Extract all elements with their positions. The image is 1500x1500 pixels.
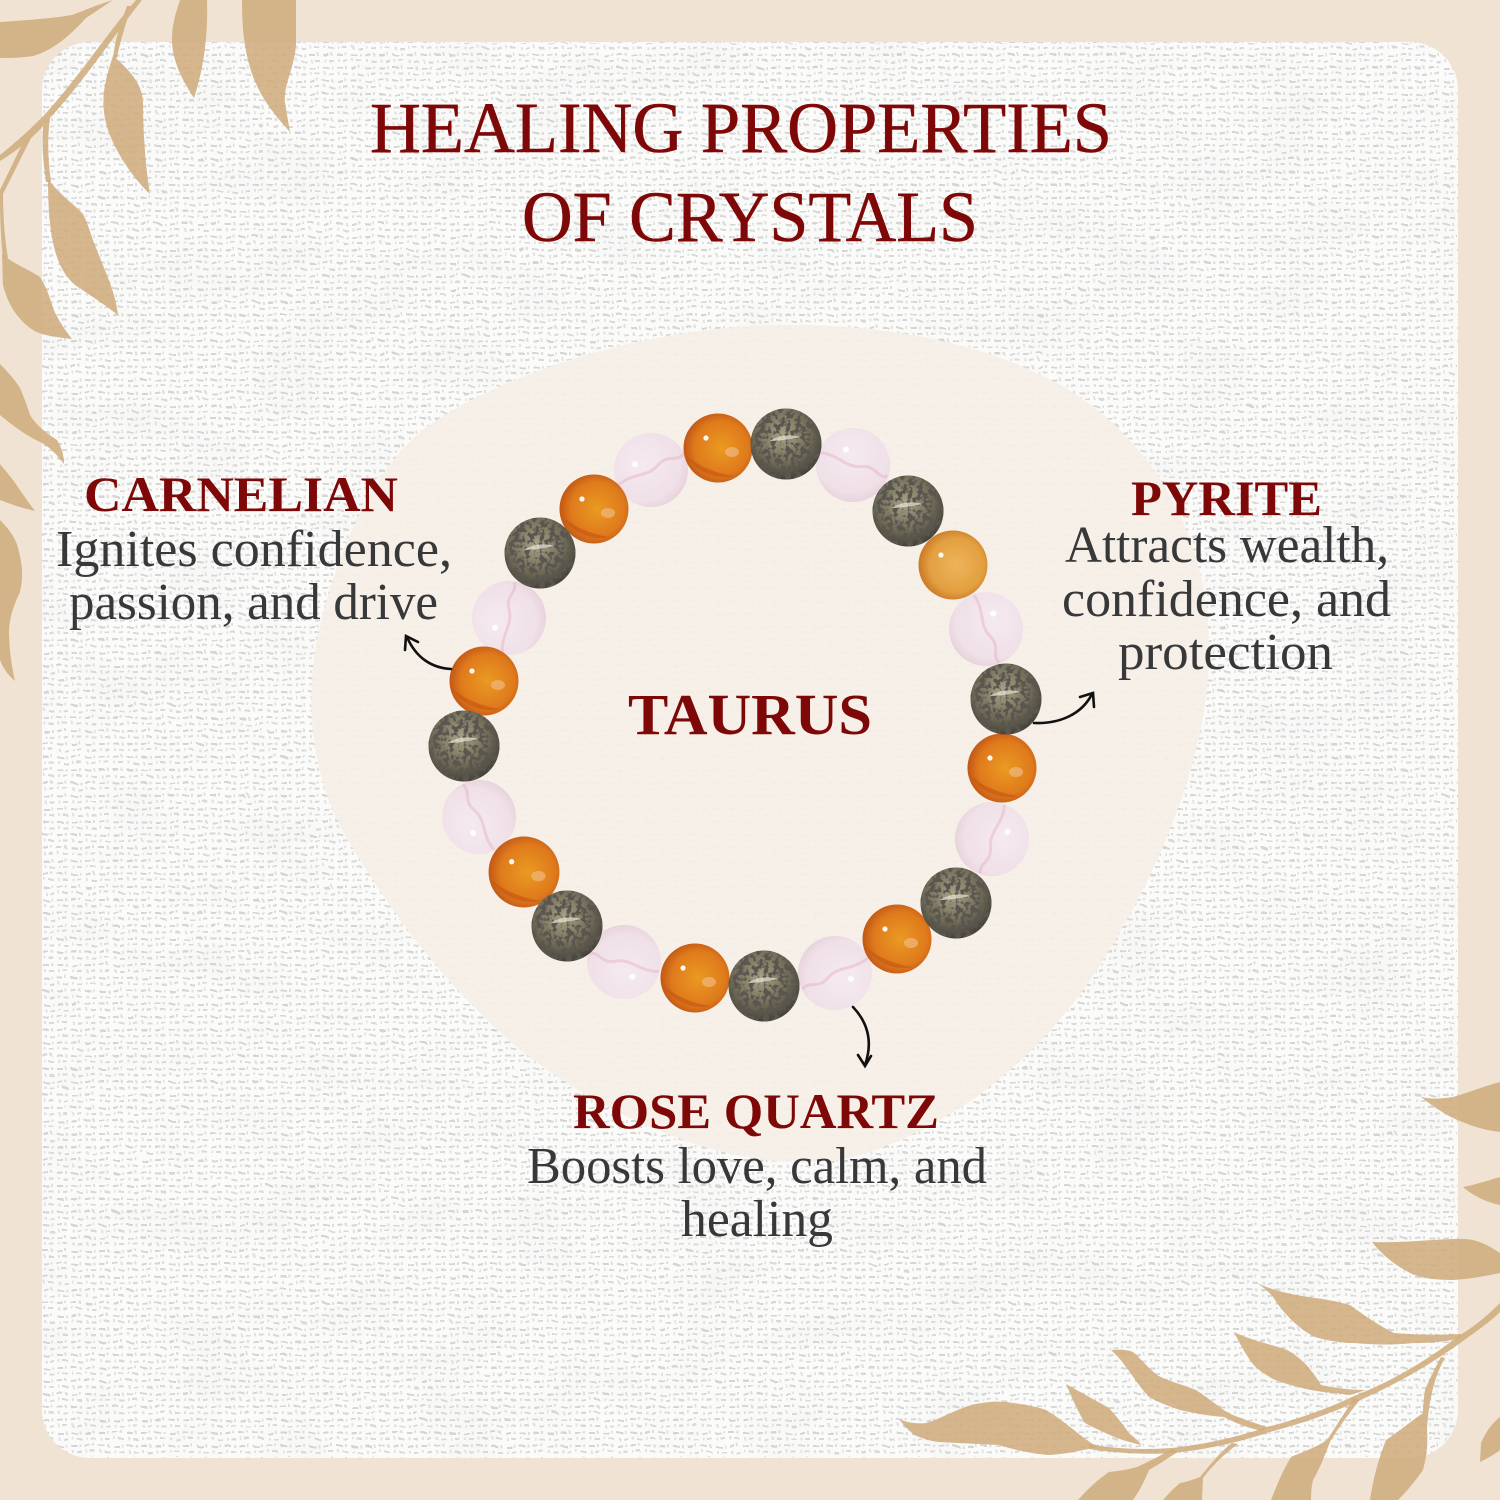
leaf xyxy=(1163,1443,1238,1500)
leaf xyxy=(0,0,113,58)
leaf xyxy=(1421,1082,1500,1132)
description: confidence, and xyxy=(1062,571,1391,628)
leaf xyxy=(172,0,207,98)
carnelian beads xyxy=(450,414,1036,1012)
leaf xyxy=(1066,1384,1141,1445)
callout: pyrite xyxy=(1062,470,1391,681)
title: OF CRYSTALS xyxy=(522,177,978,257)
main stem xyxy=(1089,1303,1500,1454)
heading: PYRITE xyxy=(1131,470,1322,526)
bracelet xyxy=(428,408,1042,1022)
branch stems xyxy=(0,0,142,258)
bottom-right leaves xyxy=(899,1082,1500,1500)
cream blob backdrop xyxy=(311,325,1209,1162)
leaf xyxy=(1255,1282,1461,1344)
arrow: rose quartz xyxy=(853,1007,871,1066)
pyrite beads xyxy=(428,408,1042,1022)
leaf xyxy=(899,1402,1097,1455)
leaf xyxy=(1234,1332,1366,1395)
description xyxy=(56,521,452,631)
leaf xyxy=(103,56,150,194)
leaf xyxy=(1370,1357,1445,1500)
heading: CARNELIAN xyxy=(84,466,398,522)
leaf xyxy=(1480,1417,1500,1462)
leaf xyxy=(1078,1449,1178,1500)
description xyxy=(527,1138,987,1248)
leaf xyxy=(0,464,35,511)
arrow: carnelian xyxy=(405,636,451,669)
arrow: pyrite xyxy=(1034,693,1094,723)
leaf xyxy=(1271,1398,1360,1500)
description: healing xyxy=(681,1191,833,1248)
leaf xyxy=(2,254,72,339)
leaf xyxy=(242,0,296,132)
leaf xyxy=(1372,1239,1500,1280)
leaf xyxy=(1111,1350,1267,1431)
description: Attracts wealth, xyxy=(1065,517,1389,574)
center label: Taurus: TAURUS xyxy=(628,682,872,747)
top-left leaves xyxy=(0,0,296,681)
description: protection xyxy=(1118,624,1333,681)
description: Boosts love, calm, and xyxy=(527,1138,987,1195)
description xyxy=(1062,517,1391,681)
rose quartz beads xyxy=(432,416,1041,1020)
leaf xyxy=(48,179,118,315)
leaf xyxy=(0,520,22,681)
title: HEALING PROPERTIES xyxy=(370,88,1112,168)
description: passion, and drive xyxy=(69,574,438,631)
leaf xyxy=(0,364,64,464)
leaf xyxy=(1463,1177,1500,1205)
callout: carnelian xyxy=(56,466,452,631)
callout: rose quartz xyxy=(527,1083,987,1248)
heading: ROSE QUARTZ xyxy=(573,1083,939,1139)
title xyxy=(370,88,1112,257)
description: Ignites confidence, xyxy=(56,521,452,578)
